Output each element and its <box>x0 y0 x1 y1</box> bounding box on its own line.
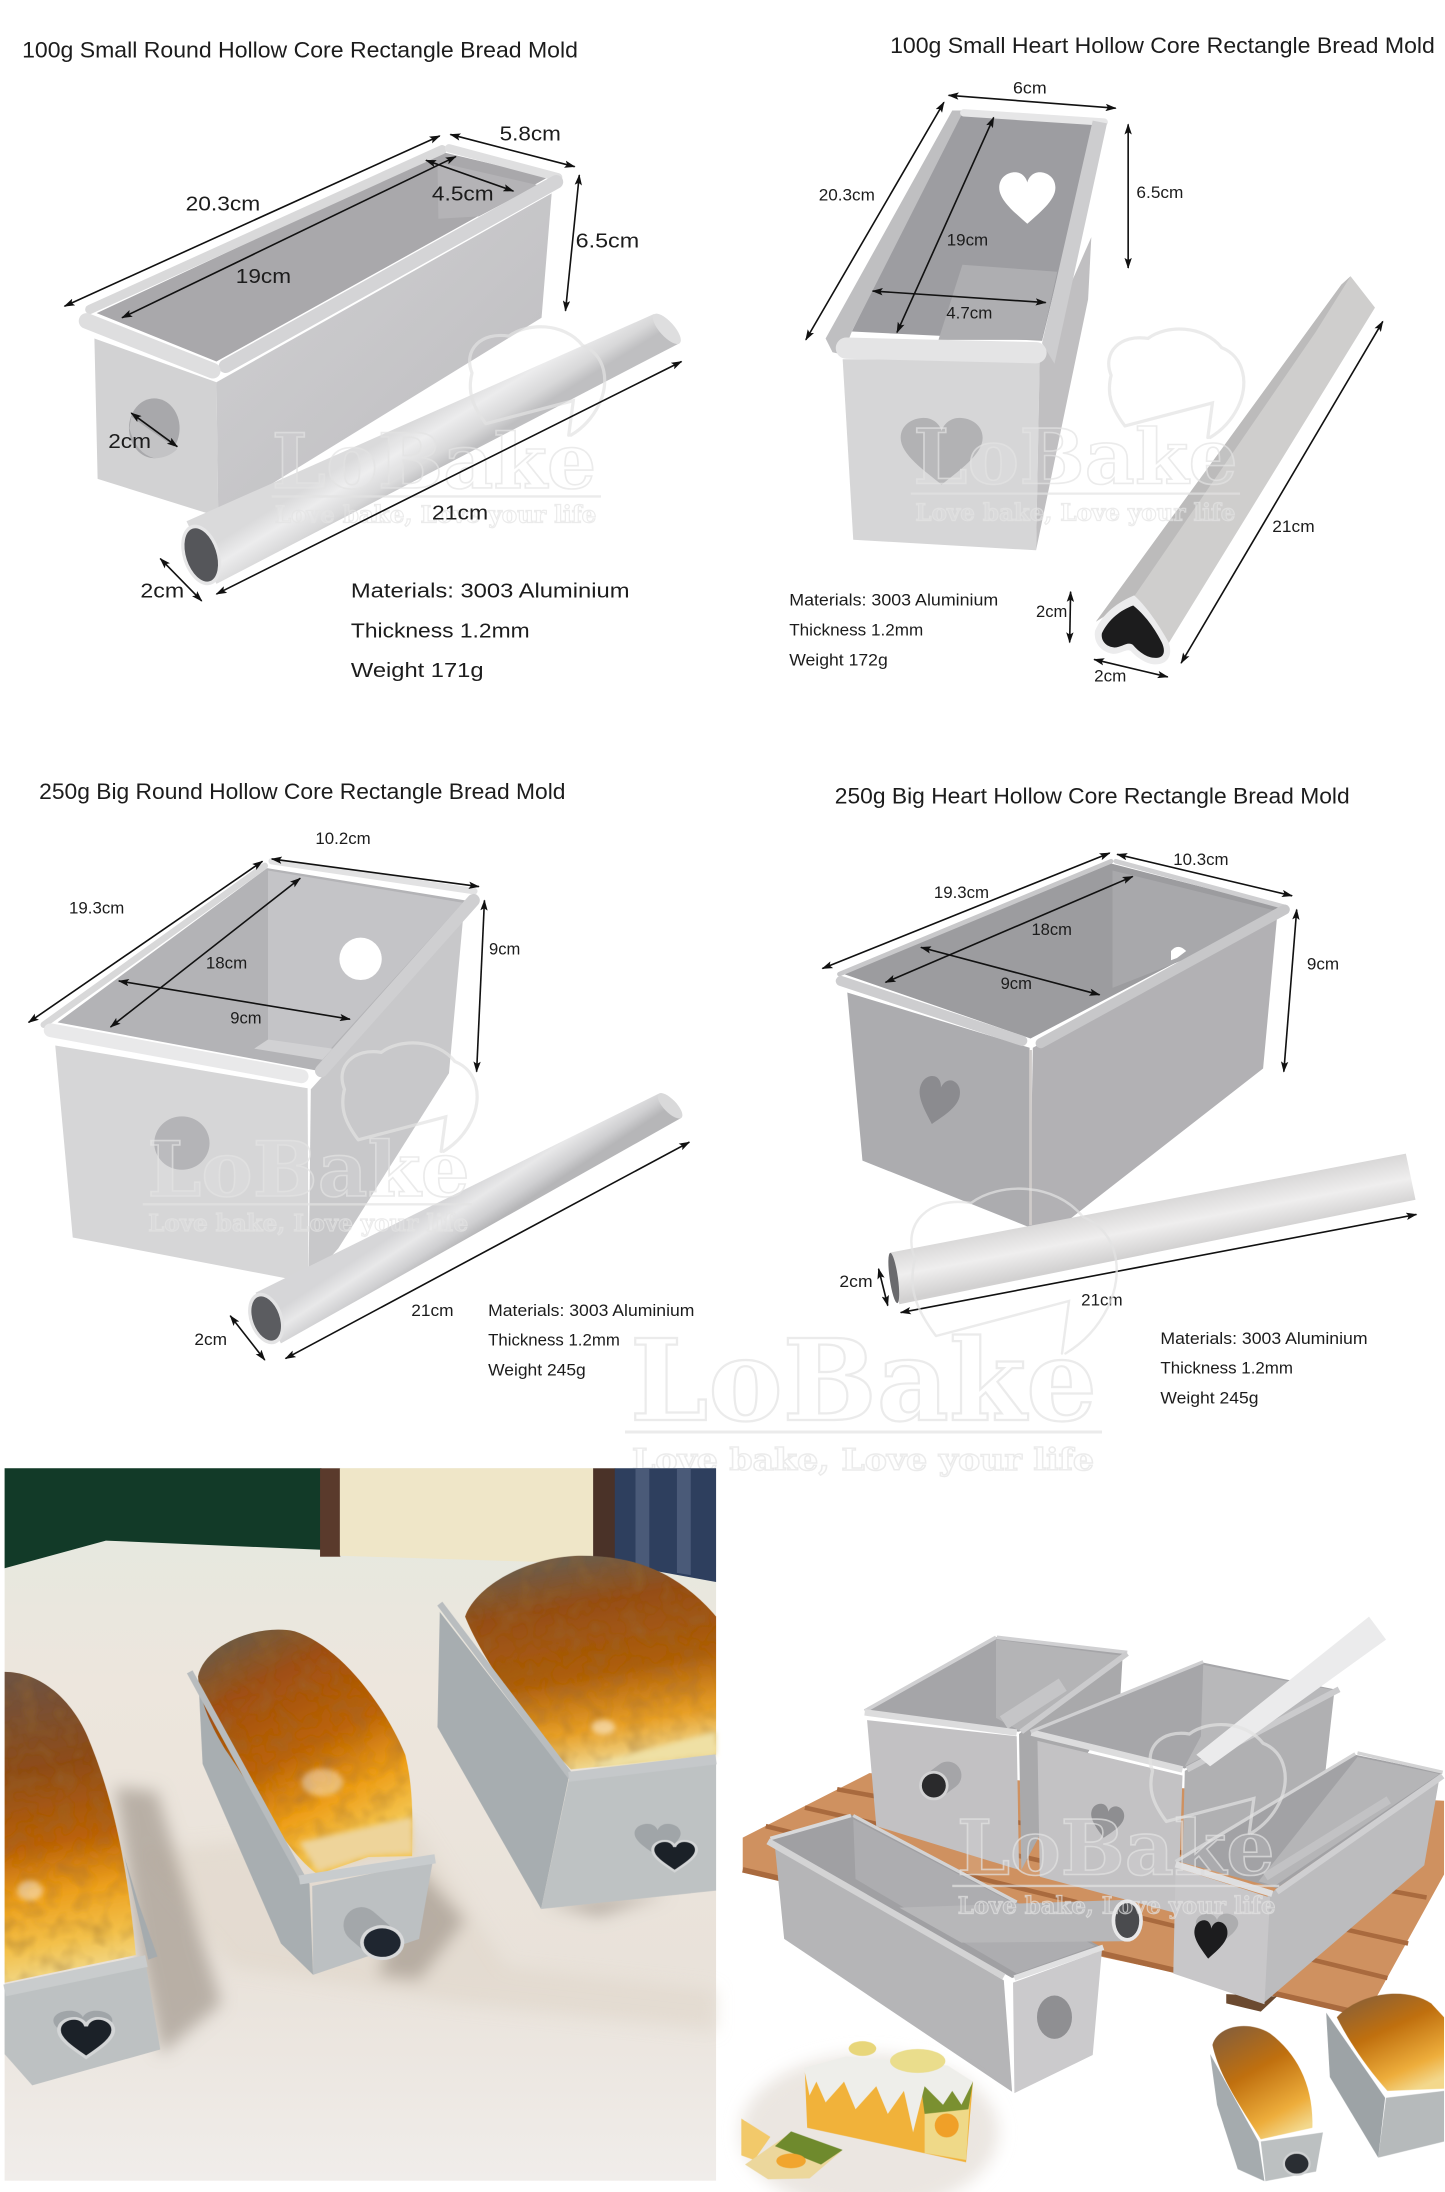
watermark: LoBake <box>143 1043 477 1237</box>
panel: 250g big heart mold <box>822 784 1416 1407</box>
panel: 100g small heart mold <box>789 33 1435 686</box>
panel: photo of four molds on wooden rack <box>740 1617 1444 2192</box>
dimension labels: 9cm <box>1307 954 1339 973</box>
dimension labels: 19cm <box>947 230 988 249</box>
specifications: Weight 245g <box>488 1361 586 1380</box>
dimension labels <box>839 850 1339 1310</box>
product: round core tube <box>174 309 685 590</box>
dimension labels: 5.8cm <box>500 123 561 145</box>
watermark: large LoBake <box>625 1189 1117 1478</box>
photo: glazed cake on plate <box>740 2041 998 2192</box>
dimension labels: 4.5cm <box>432 183 494 205</box>
panel: photo of baked loaves in molds <box>5 1468 716 2181</box>
product: heart mold body <box>826 111 1107 550</box>
dimension labels <box>69 829 520 1349</box>
specifications: Thickness 1.2mm <box>789 620 923 639</box>
photo: left loaf in pan <box>5 1672 160 2085</box>
photo: middle loaf in pan <box>190 1630 435 1975</box>
watermark: LoBake: Love bake, Love your life <box>958 1893 1276 1920</box>
watermark: LoBake: Love bake, Love your life <box>275 502 596 529</box>
dimension labels: 2cm <box>1036 602 1067 621</box>
product: round mold body <box>87 148 558 517</box>
photo: small loaves in pans <box>1210 1994 1444 2181</box>
dimension labels: 18cm <box>206 954 247 973</box>
specifications: Materials: 3003 Aluminium <box>789 591 998 610</box>
specifications <box>1160 1329 1368 1407</box>
watermark: LoBake: LoBake <box>272 417 596 506</box>
specifications: Weight 171g <box>351 660 484 682</box>
dimension labels <box>819 78 1315 686</box>
dimension arrows <box>64 134 682 601</box>
specifications <box>488 1301 694 1380</box>
dimension labels: 4.7cm <box>946 304 992 323</box>
specifications: Thickness 1.2mm <box>488 1331 620 1350</box>
dimension labels: 2cm <box>108 431 151 453</box>
product: core tube <box>886 1154 1416 1304</box>
watermark: LoBake: Love bake, Love your life <box>915 499 1235 526</box>
dimension labels: 10.2cm <box>315 829 371 848</box>
product: center heart mold <box>1031 1617 1386 1914</box>
specifications: Thickness 1.2mm <box>1160 1358 1293 1377</box>
product: right heart mold <box>1173 1753 1443 2004</box>
dimension labels: 19.3cm <box>934 883 989 902</box>
watermark: LoBake <box>272 327 605 529</box>
title: 100g small heart: 100g Small Heart Hollow Core Rectangle Bread Mold <box>890 33 1435 58</box>
dimension labels: 9cm <box>230 1008 262 1027</box>
panel: 100g small round mold <box>22 38 685 682</box>
specifications: Weight 245g <box>1160 1388 1258 1407</box>
specifications <box>789 591 998 669</box>
dimension labels: 6.5cm <box>1136 183 1183 202</box>
watermark: large LoBake: Love bake, Love your life <box>632 1443 1094 1478</box>
specifications: Thickness 1.2mm <box>351 620 530 642</box>
title: 250g big heart: 250g Big Heart Hollow Core Rectangle Bread Mold <box>835 784 1350 809</box>
watermark: LoBake <box>911 329 1244 526</box>
specifications: Materials: 3003 Aluminium <box>351 580 630 602</box>
watermark: LoBake: LoBake <box>913 413 1238 502</box>
title: 250g big round: 250g Big Round Hollow Core Rectangle Bread Mold <box>39 779 565 804</box>
product: heart core tube <box>1095 276 1375 664</box>
dimension labels: 10.3cm <box>1173 850 1229 869</box>
title: 100g small round: 100g Small Round Hollow Core Rectangle Bread Mold <box>22 38 578 63</box>
product: round core tube <box>241 1089 686 1349</box>
dimension labels: 2cm <box>140 581 184 603</box>
product: front-left round mold with tube <box>768 1815 1143 2093</box>
specifications <box>351 580 630 682</box>
dimension labels: 2cm <box>1094 667 1126 686</box>
watermark: large LoBake: LoBake <box>630 1316 1097 1447</box>
dimension labels: 21cm <box>1081 1291 1123 1310</box>
dimension arrows <box>806 95 1383 677</box>
photo: wooden rack <box>743 1773 1444 2015</box>
watermark: LoBake: LoBake <box>957 1803 1275 1892</box>
dimension labels: 20.3cm <box>819 185 875 204</box>
dimension labels: 6cm <box>1013 78 1047 97</box>
product: big round mold body <box>44 861 474 1283</box>
dimension labels: 2cm <box>194 1330 227 1349</box>
dimension labels: 2cm <box>839 1272 873 1291</box>
specifications: Materials: 3003 Aluminium <box>1160 1329 1368 1348</box>
photo: marble streaks and cast shadows <box>115 1787 716 2054</box>
dimension labels: 18cm <box>1031 920 1072 939</box>
dimension labels: 6.5cm <box>576 231 639 253</box>
dimension labels: 19cm <box>236 266 291 288</box>
dimension labels <box>108 123 639 603</box>
dimension labels: 21cm <box>1272 517 1315 536</box>
specifications: Materials: 3003 Aluminium <box>488 1301 694 1320</box>
watermark: LoBake <box>952 1725 1285 1920</box>
dimension labels: 21cm <box>411 1301 454 1320</box>
photo: room background <box>5 1468 716 2181</box>
specifications: Weight 172g <box>789 650 888 669</box>
dimension labels: 9cm <box>1001 974 1032 993</box>
dimension labels: 21cm <box>432 502 488 524</box>
product: big heart mold body <box>839 861 1286 1227</box>
dimension labels: 20.3cm <box>186 193 260 215</box>
dimension labels: 19.3cm <box>69 898 124 917</box>
dimension labels: 9cm <box>489 940 520 959</box>
product: back-left round mold <box>865 1637 1127 1870</box>
panel: 250g big round mold <box>29 779 694 1380</box>
photo: right loaf in pan <box>437 1556 716 1909</box>
watermark: LoBake: Love bake, Love your life <box>148 1210 468 1237</box>
watermark: LoBake: LoBake <box>147 1125 470 1214</box>
dimension arrows <box>29 859 689 1360</box>
dimension arrows <box>822 853 1416 1313</box>
